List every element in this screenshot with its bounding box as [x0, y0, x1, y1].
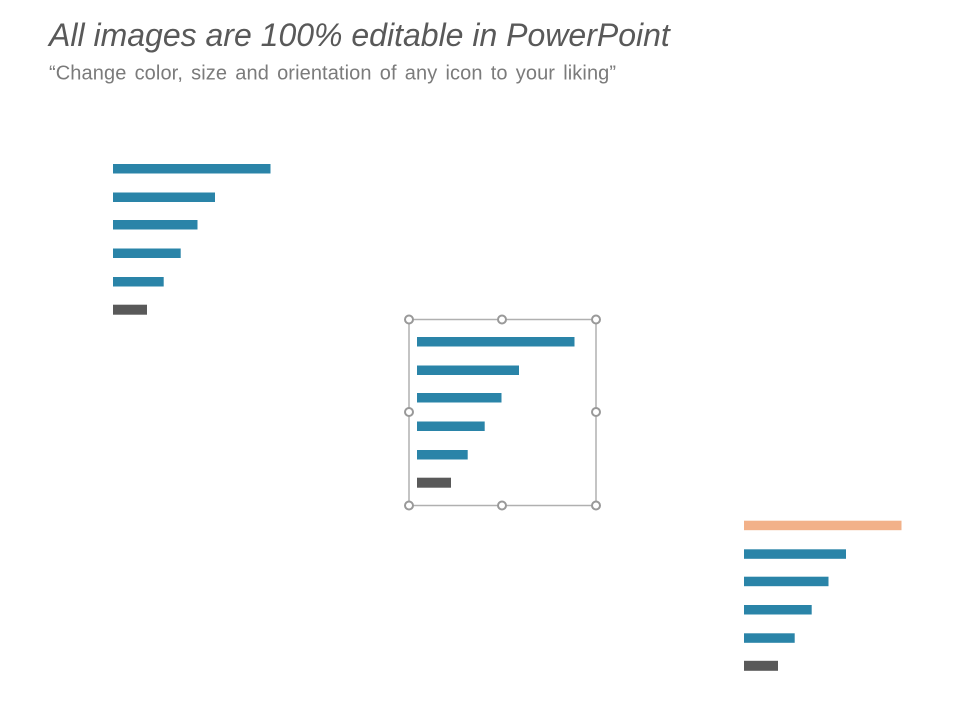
bar icon: top left: [113, 164, 270, 315]
bar icon: bottom right: [744, 521, 902, 671]
bar icon: center with selection frame: [405, 316, 600, 510]
title: All images are 100% editable in PowerPoint: [47, 17, 671, 53]
subtitle: “Change color, size and orientation of any icon to your liking”: [49, 62, 616, 84]
